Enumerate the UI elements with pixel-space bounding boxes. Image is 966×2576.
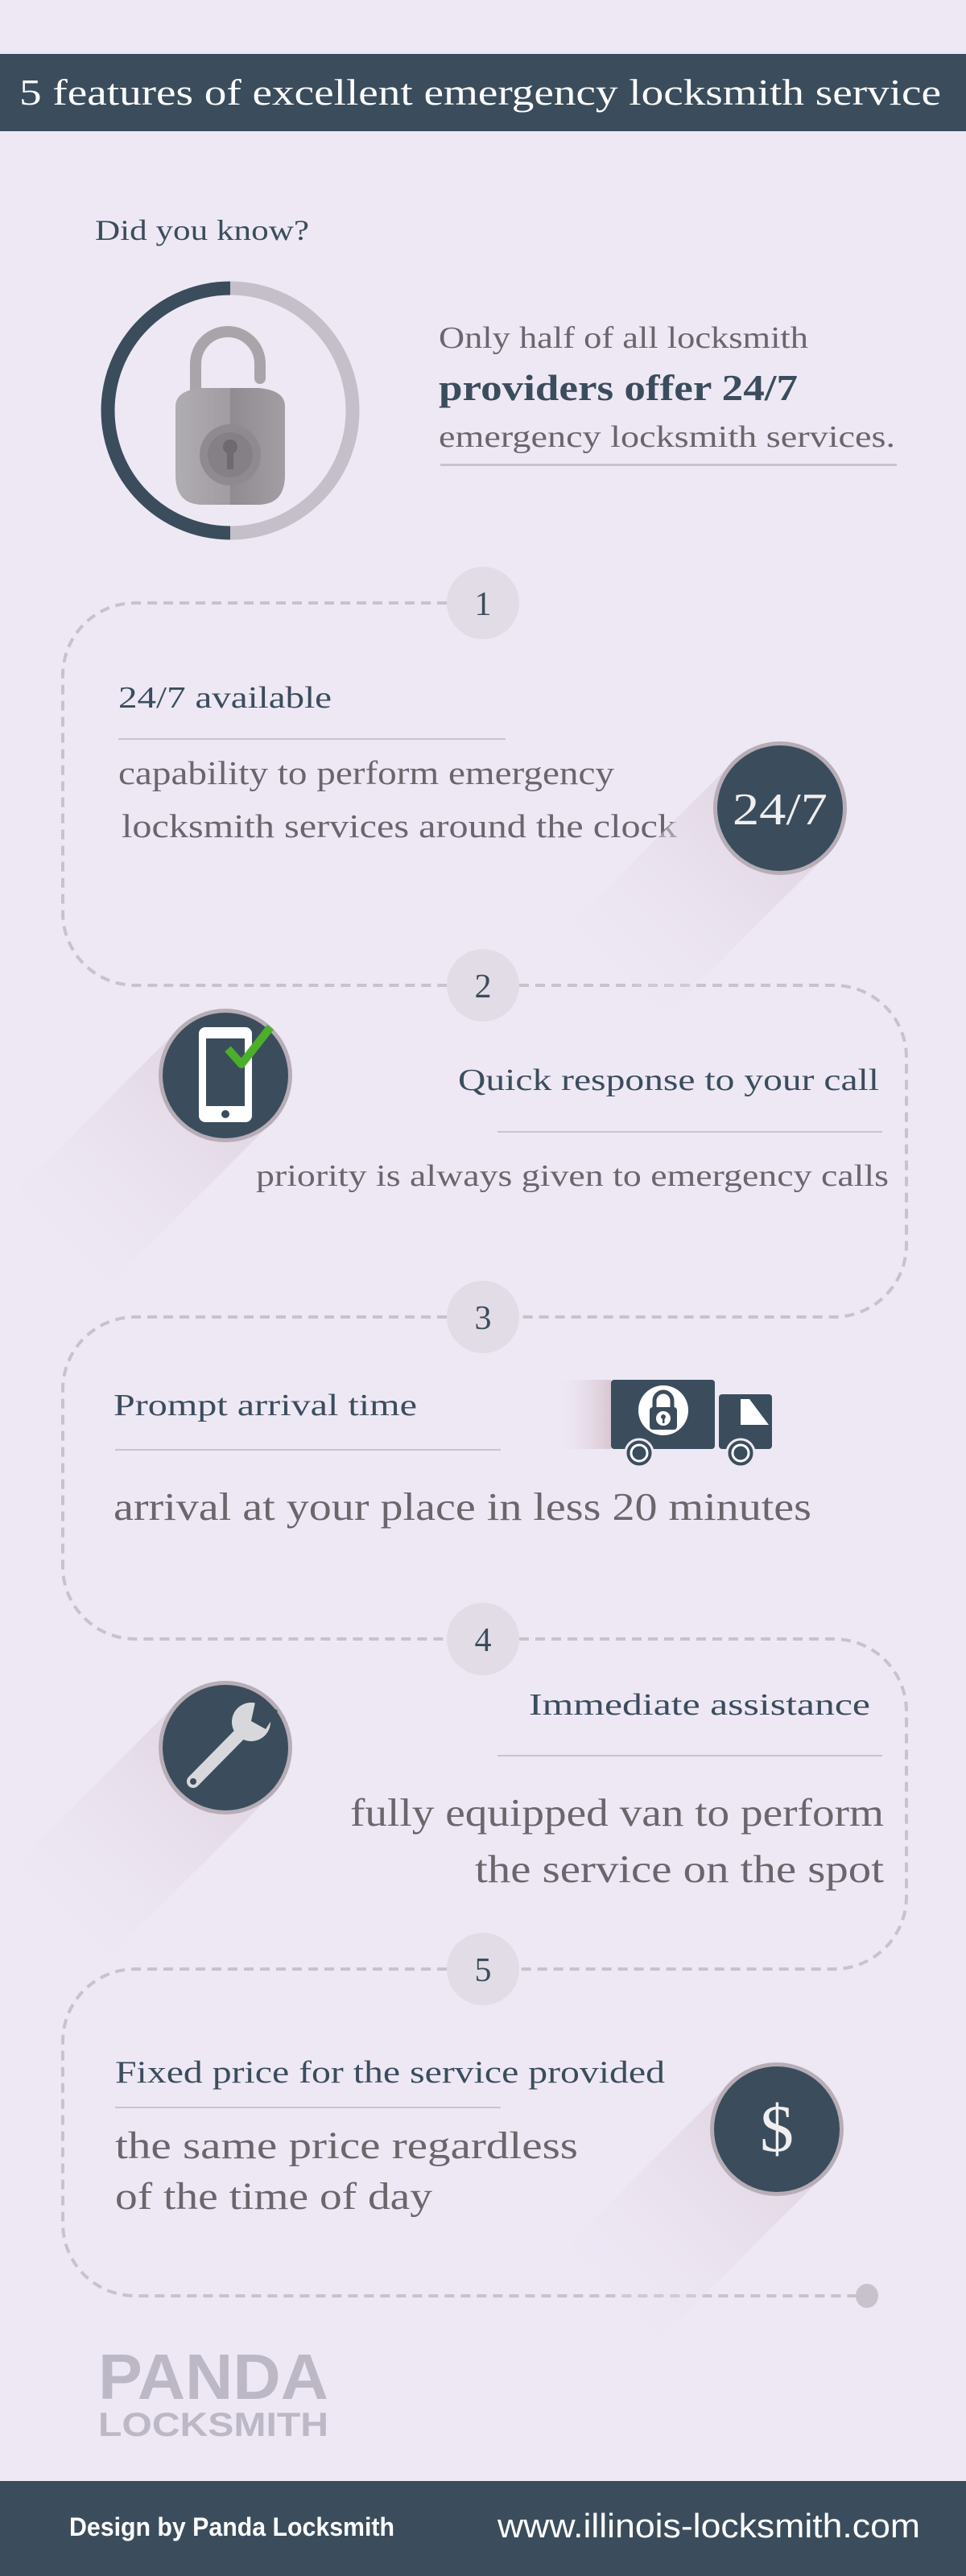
step number 3: 3 [475,1300,491,1337]
icon: 24/7 circle [572,741,847,1016]
step number 2: 2 [475,968,491,1005]
step number 2 [447,949,519,1022]
dashed path connecting steps [63,603,906,2296]
panel 4 text: Immediate assistance [529,1688,870,1722]
icon: wrench [18,1681,292,1955]
panel 4 text [350,1688,884,1891]
step number 1: 1 [475,586,491,623]
title bar [0,54,966,131]
panel 5 text: Fixed price for the service provided [115,2055,666,2090]
panel 3 text: Prompt arrival time [114,1389,417,1422]
panel 5 text: the same price regardless [115,2124,578,2167]
fact text [439,321,897,466]
logo: Panda Locksmith: PANDA [98,2341,328,2413]
step number 3 [447,1281,519,1353]
panel 4 text: fully equipped van to perform [350,1790,884,1835]
footer: Design by Panda Locksmith [69,2512,394,2541]
panel 3 text: arrival at your place in less 20 minutes [114,1484,811,1529]
panel 1 text: capability to perform emergency [118,754,615,791]
footer: www.illinois-locksmith.com [497,2507,920,2545]
step number 1 [447,567,519,639]
logo: Panda Locksmith: LOCKSMITH [98,2405,328,2443]
title bar: 5 features of excellent emergency locksmith service [19,72,941,113]
end dot [856,2284,878,2308]
fact text: providers offer 24/7 [439,367,798,408]
panel 1 text: locksmith services around the clock [122,807,678,844]
step number 4: 4 [475,1622,491,1659]
panel 2 text: priority is always given to emergency calls [256,1159,889,1193]
did you know heading: Did you know? [95,214,309,246]
footer [0,2481,966,2576]
logo: Panda Locksmith [98,2341,328,2443]
panel 2 text [256,1063,889,1193]
panel 5 text: of the time of day [115,2175,432,2218]
icon: truck [552,1380,772,1467]
panel 4 text: the service on the spot [475,1847,884,1891]
icon: phone with check [18,1009,292,1283]
step number 4 [447,1603,519,1675]
panel 1 text [118,681,678,844]
panel 1 text: 24/7 available [118,681,332,715]
panel 5 text [115,2055,666,2218]
fact text: Only half of all locksmith [439,321,808,355]
icon: 24/7 circle: 24/7 [733,785,828,835]
step number 5 [447,1933,519,2005]
panel 3 text [114,1389,811,1529]
fact text: emergency locksmith services. [439,420,895,454]
icon: dollar: $ [760,2091,794,2166]
panel 2 text: Quick response to your call [458,1063,879,1097]
icon: dollar [569,2062,844,2337]
step number 5: 5 [475,1952,491,1989]
icon: half ring with padlock [108,288,353,533]
